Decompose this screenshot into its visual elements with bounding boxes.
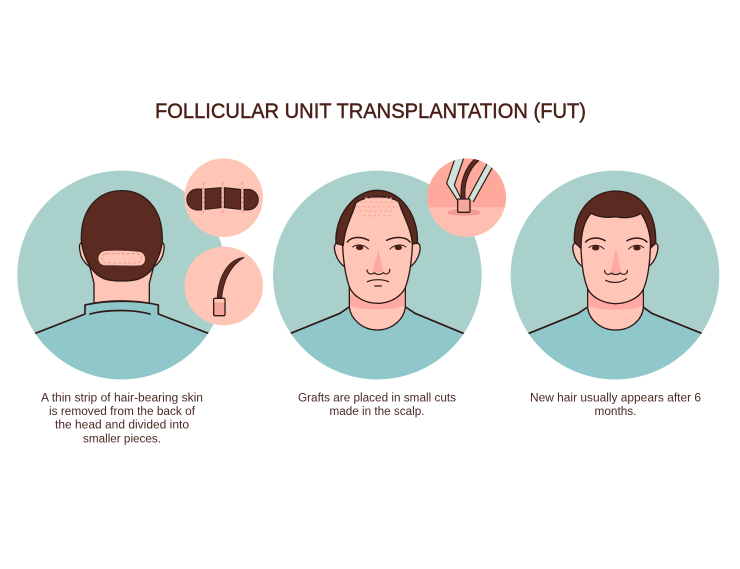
caption: step 2: Grafts are placed in small cuts bbox=[298, 392, 456, 404]
caption: step 1: the head and divided into bbox=[55, 420, 189, 432]
title: FOLLICULAR UNIT TRANSPLANTATION (FUT) bbox=[155, 100, 586, 123]
shirt bbox=[290, 306, 464, 380]
face bbox=[342, 192, 413, 303]
donor strip bbox=[98, 251, 145, 266]
caption: step 1 bbox=[41, 392, 203, 446]
caption: step 3: months. bbox=[594, 406, 636, 418]
caption: step 3: New hair usually appears after 6 bbox=[530, 392, 701, 404]
caption: step 2 bbox=[298, 392, 456, 418]
eyebrows bbox=[347, 237, 410, 242]
caption: step 1: A thin strip of hair-bearing skin bbox=[41, 392, 203, 404]
ears bbox=[573, 243, 658, 267]
face bbox=[581, 202, 650, 304]
hair bbox=[81, 191, 162, 281]
mouth bbox=[606, 279, 627, 282]
inset: implanting graft with tweezers bbox=[427, 157, 507, 237]
teal circle background bbox=[511, 171, 719, 379]
hair bbox=[574, 191, 656, 248]
nose bbox=[605, 248, 627, 274]
shirt bbox=[34, 302, 209, 380]
panel: step 2 grafts placed bbox=[273, 157, 507, 383]
eyes bbox=[589, 245, 644, 250]
mouth bbox=[367, 280, 389, 286]
caption: step 3 bbox=[530, 392, 701, 418]
panel: step 3 new hair bbox=[511, 171, 722, 385]
nose bbox=[367, 250, 390, 274]
caption: step 1: smaller pieces. bbox=[83, 434, 161, 446]
graft dots bbox=[357, 198, 398, 216]
ears bbox=[334, 243, 420, 267]
thinning hair bbox=[336, 190, 417, 245]
shirt bbox=[528, 306, 702, 380]
caption: step 1: is removed from the back of bbox=[49, 406, 196, 418]
neck and ears bbox=[79, 243, 164, 303]
eyebrows bbox=[586, 238, 647, 242]
eyes bbox=[353, 245, 406, 250]
teal circle background bbox=[17, 171, 226, 379]
neck bbox=[588, 283, 643, 330]
panel: step 1 back of head bbox=[17, 158, 263, 383]
teal circle background bbox=[273, 171, 482, 379]
inset: single graft bbox=[184, 247, 263, 325]
caption: step 2: made in the scalp. bbox=[330, 406, 424, 418]
neck bbox=[349, 283, 405, 330]
inset: strip divided bbox=[184, 158, 263, 237]
